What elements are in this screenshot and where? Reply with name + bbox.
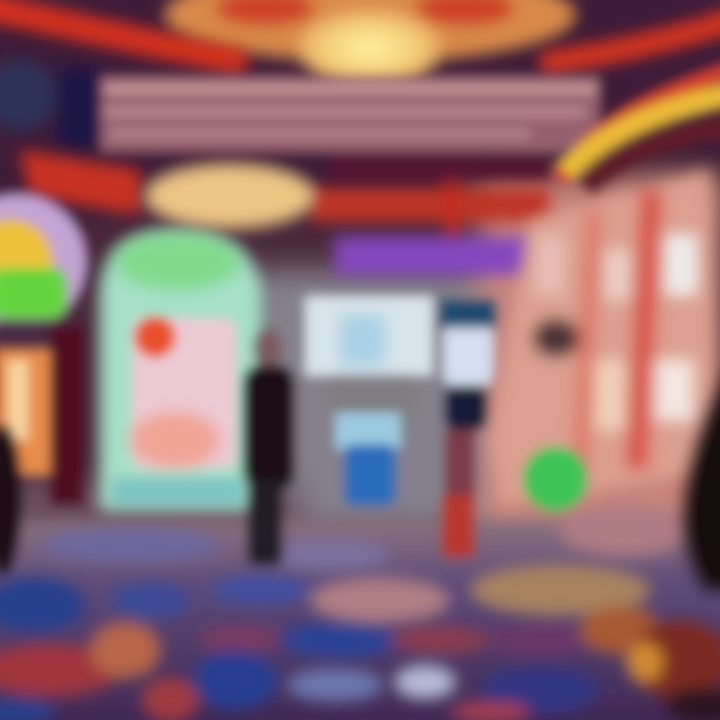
person with blue top — [440, 300, 496, 557]
gold ceiling lamp — [145, 164, 315, 228]
dark foreground figure left — [0, 425, 21, 575]
green round button — [523, 447, 587, 511]
right slot machines — [490, 170, 715, 556]
left arch machine — [0, 194, 86, 505]
central screen machine — [305, 296, 433, 505]
green slot machine — [100, 230, 262, 510]
red ceiling bands — [0, 5, 720, 62]
person in black — [244, 328, 294, 565]
purple band — [335, 237, 533, 275]
right rainbow arc — [560, 68, 720, 188]
dark foreground figure right — [683, 350, 720, 590]
floor carpet — [0, 520, 720, 720]
upper banner — [100, 76, 600, 181]
mid backdrop — [0, 0, 720, 540]
ceiling dome — [165, 0, 575, 86]
dark navy ornament — [0, 59, 98, 148]
lower red bands — [20, 150, 550, 240]
